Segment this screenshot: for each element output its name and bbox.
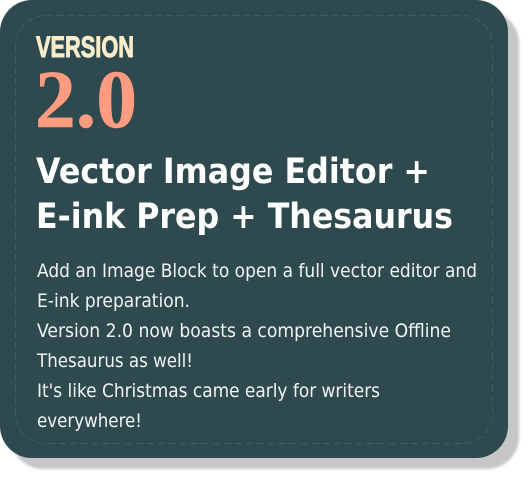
body text: E-ink preparation. — [37, 290, 190, 312]
heading: E-ink Prep + Thesaurus — [36, 197, 453, 237]
version number: 2.0 — [35, 53, 137, 145]
body text: It's like Christmas came early for writers — [37, 380, 380, 402]
body text — [36, 260, 477, 432]
body text: everywhere! — [37, 410, 142, 432]
heading: Vector Image Editor + — [36, 152, 430, 192]
body text: Thesaurus as well! — [36, 350, 193, 372]
version label: VERSION — [36, 31, 134, 64]
body text: Add an Image Block to open a full vector editor and — [37, 260, 477, 282]
heading — [36, 152, 453, 237]
body text: Version 2.0 now boasts a comprehensive Offline — [37, 320, 451, 342]
